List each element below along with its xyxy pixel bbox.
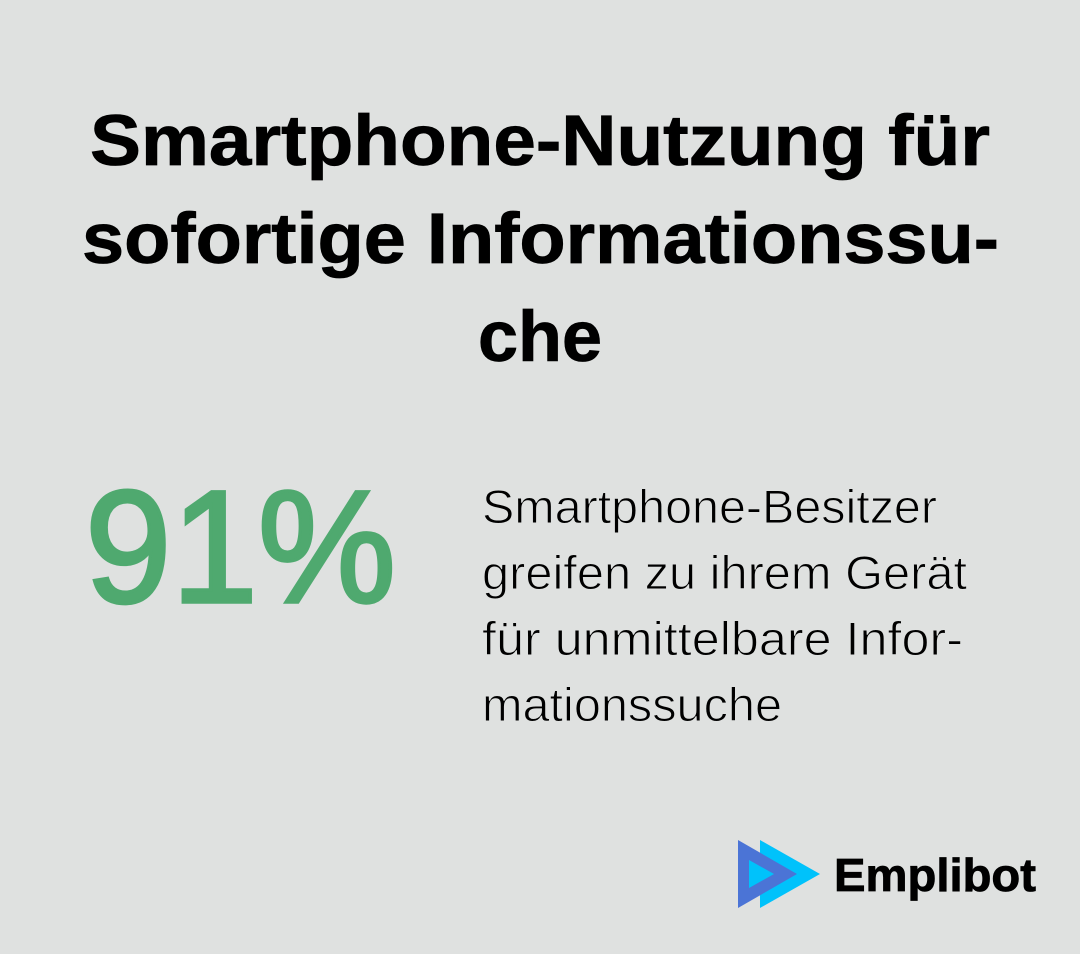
statistic description: für unmittelbare Infor- [482, 612, 963, 665]
statistic description: Smartphone-Besitzer [482, 480, 937, 533]
statistic: 91%: 91% [85, 457, 396, 636]
title [82, 102, 999, 377]
statistic description [482, 480, 967, 731]
logo wordmark: Emplibot [834, 849, 1036, 901]
statistic description: mationssuche [482, 678, 782, 731]
title: sofortige Informationssu- [82, 200, 999, 279]
logo: Emplibot [738, 840, 1036, 908]
title: Smartphone-Nutzung für [90, 102, 990, 181]
title: che [478, 298, 602, 377]
statistic description: greifen zu ihrem Gerät [482, 546, 967, 599]
icon: play triangles [738, 840, 820, 908]
